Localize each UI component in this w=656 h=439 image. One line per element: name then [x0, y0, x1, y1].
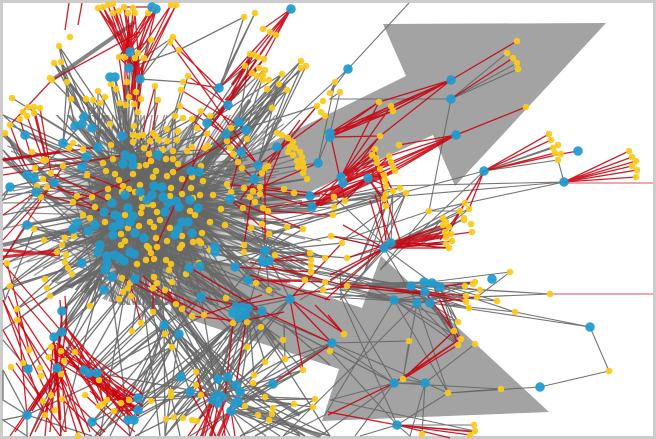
blue nodes: lower [27, 297, 290, 422]
right side connecting edges [240, 3, 564, 270]
duplicate hub fans, central only [3, 115, 322, 305]
central cluster shading [60, 135, 255, 290]
yellow nodes: central [32, 76, 307, 228]
thick edge bundles [3, 22, 320, 436]
yellow nodes: upper left [5, 4, 325, 133]
blue nodes: right side [330, 69, 590, 425]
arrow: lower right [170, 250, 549, 421]
top fans [212, 9, 291, 125]
hub fans [3, 46, 325, 436]
yellow nodes: lower left and bottom [7, 222, 325, 436]
duplicate lower-left red mesh [8, 296, 143, 432]
arrow: upper right [225, 23, 606, 222]
blue nodes: central [27, 186, 269, 290]
right side red fans [310, 41, 526, 280]
yellow nodes: right side [330, 41, 637, 435]
blue nodes: upper left [10, 7, 318, 207]
central red edges [3, 106, 340, 415]
lower-left red mesh [3, 300, 138, 436]
thick red bundles [3, 25, 395, 436]
